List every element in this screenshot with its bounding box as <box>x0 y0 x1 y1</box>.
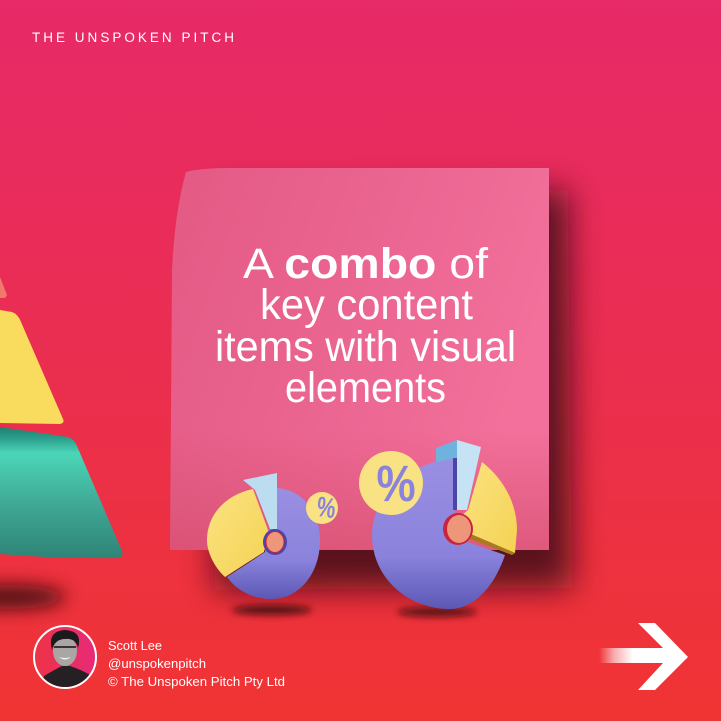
avatar hair <box>51 630 79 650</box>
small pie blue wedge <box>243 473 277 529</box>
large pie chart <box>359 440 517 617</box>
small pie yellow wedge <box>207 489 268 577</box>
note headline: elements <box>285 364 446 412</box>
author details <box>108 638 285 689</box>
note headline <box>215 240 516 412</box>
large pie hub <box>443 513 473 545</box>
note headline: items with visual <box>215 323 516 371</box>
author details: @unspokenpitch <box>108 656 206 671</box>
large percent badge <box>359 451 423 515</box>
next arrow <box>599 623 688 690</box>
pyramid top tier <box>0 277 7 298</box>
pyramid illustration <box>0 277 122 609</box>
large pie yellow wedge <box>462 462 517 553</box>
small percent badge: % <box>315 491 338 525</box>
avatar smile <box>59 657 71 660</box>
author avatar <box>34 626 96 690</box>
small pie chart <box>207 473 338 615</box>
note headline: key content <box>260 281 473 329</box>
brand heading: THE UNSPOKEN PITCH <box>32 30 234 45</box>
large pie purple body <box>372 458 505 609</box>
note headline: A combo of <box>243 240 489 288</box>
note shadow <box>215 190 572 590</box>
author details: © The Unspoken Pitch Pty Ltd <box>108 674 285 689</box>
avatar torso <box>44 666 90 687</box>
avatar face <box>53 636 77 666</box>
pyramid green tier <box>0 427 122 558</box>
author details: Scott Lee <box>108 638 162 653</box>
sticky note <box>170 168 549 550</box>
small pie hub <box>263 529 287 555</box>
pyramid yellow tier <box>0 310 64 424</box>
small pie purple body <box>227 488 320 599</box>
pyramid floor shadow <box>0 585 66 609</box>
large pie blue wedge <box>436 440 481 510</box>
small pie shadow <box>232 605 312 615</box>
large pie shadow <box>397 607 477 617</box>
large percent badge: % <box>376 456 416 513</box>
avatar glasses <box>54 646 76 648</box>
